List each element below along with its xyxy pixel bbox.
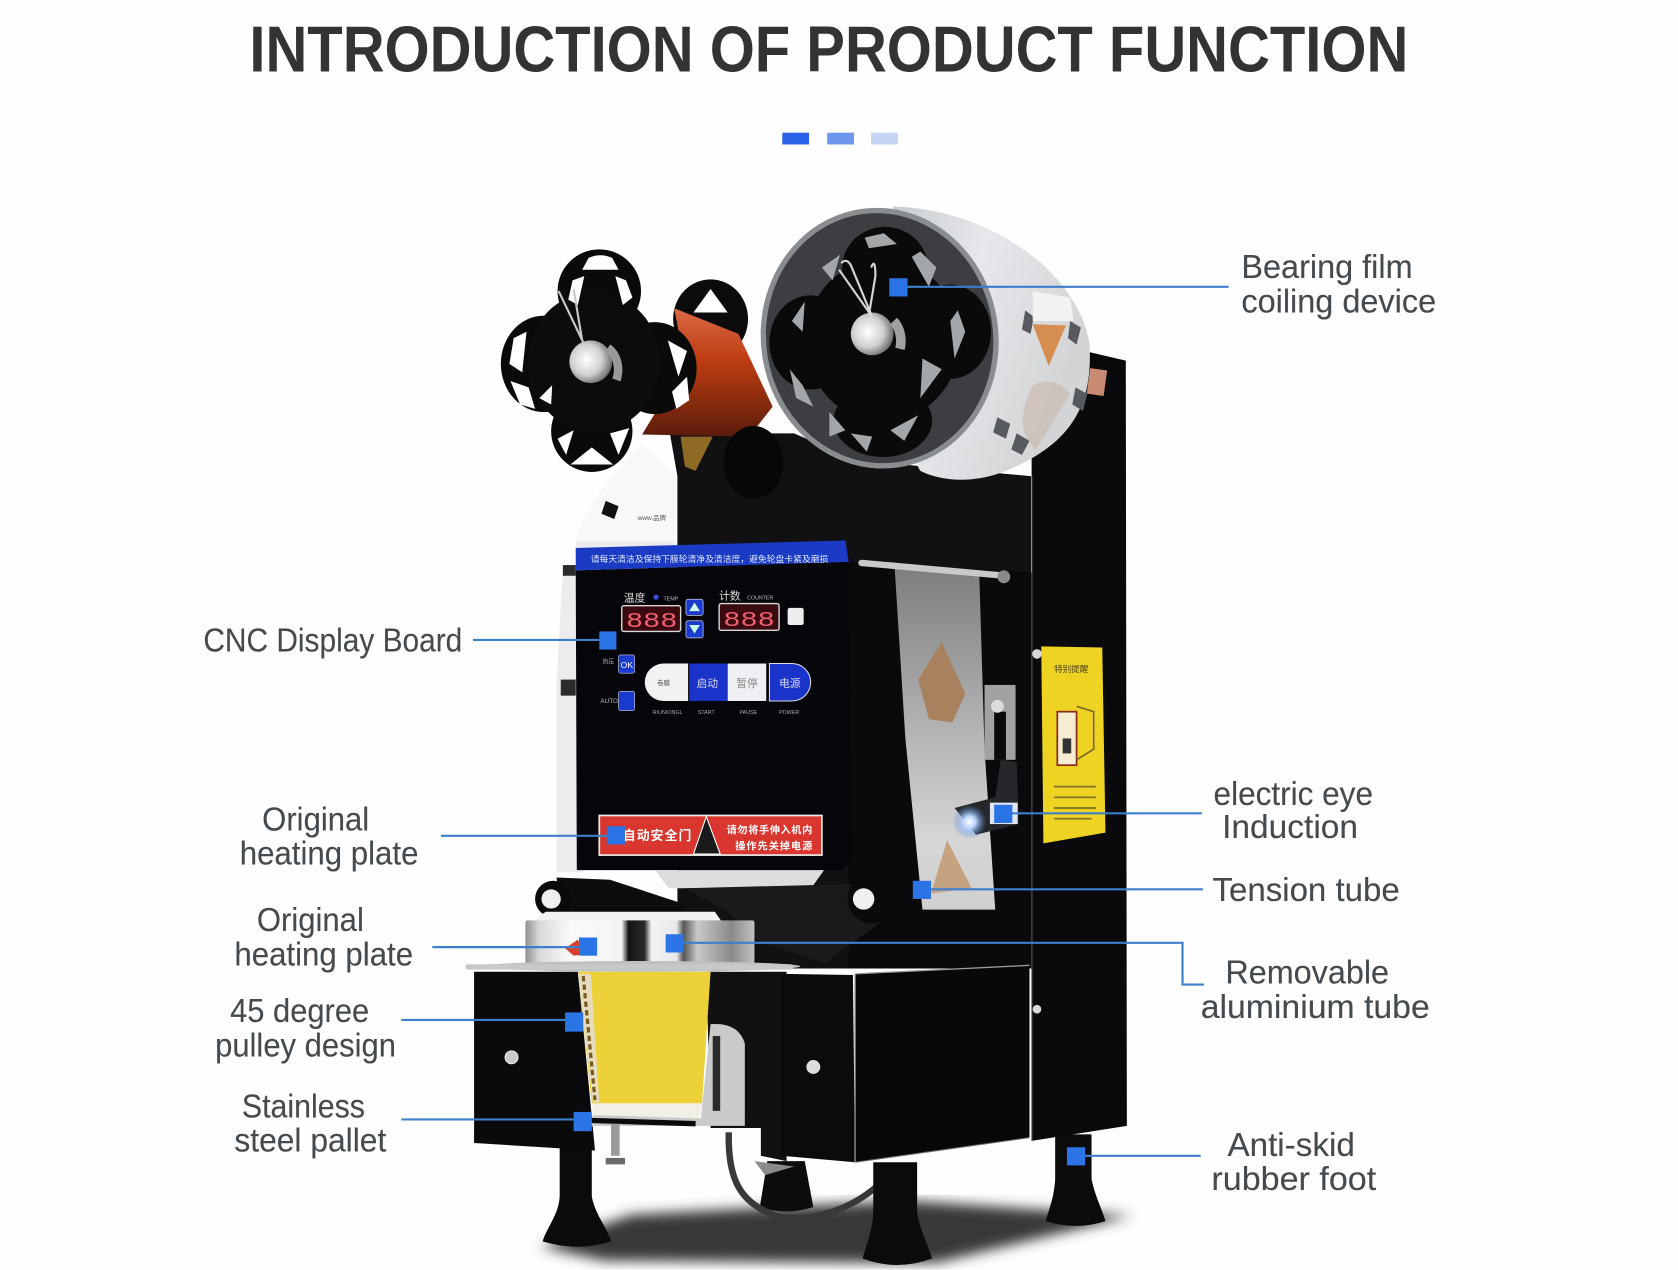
tower screws	[1032, 649, 1042, 1013]
product illustration: cup sealing machine: www.品牌	[637, 513, 667, 522]
film strip with tension rod	[861, 563, 1010, 910]
decorative title squares	[782, 133, 898, 144]
leader line: removable aluminium tube	[666, 934, 1204, 985]
function button strip: 电源	[779, 677, 801, 690]
rear foot	[760, 1161, 813, 1211]
label: original heating plate 1: Original	[262, 801, 369, 838]
marker	[666, 934, 684, 952]
sealing head and handles	[535, 870, 897, 963]
label: stainless steel pallet: Stainless	[242, 1088, 365, 1125]
function button strip: RIUNIONGL	[653, 710, 683, 716]
blue notice header	[576, 540, 849, 570]
marker	[1067, 1147, 1085, 1165]
label: electric eye induction	[1214, 776, 1373, 846]
counter readout	[719, 589, 804, 633]
counter readout: 计数	[719, 589, 741, 602]
marker	[913, 881, 931, 899]
lower cabinet	[754, 965, 1029, 1175]
inner dark column	[706, 972, 787, 1161]
leader line: 45 degree pulley design	[401, 1012, 583, 1032]
yellow warning sticker: 特别提醒	[1054, 663, 1089, 674]
label: 45 degree pulley design	[215, 993, 396, 1064]
front feet	[543, 1134, 1105, 1265]
removable aluminium tube	[466, 912, 800, 972]
function button strip: PAUSE	[739, 710, 758, 716]
left reel	[501, 249, 697, 472]
marker	[889, 278, 907, 296]
right side body panel	[849, 562, 1032, 969]
temperature readout: TEMP	[663, 596, 679, 602]
main film roll	[744, 192, 1090, 484]
label: original heating plate 1	[240, 801, 418, 873]
marker	[607, 826, 625, 844]
function button strip: POWER	[779, 710, 799, 716]
counter readout: 888	[723, 609, 775, 633]
red safety label	[599, 815, 822, 855]
control panel: 请每天清洁及保持下膜轮清净及清洁度，避免轮盘卡紧及磨损	[591, 553, 829, 564]
product illustration: cup sealing machine	[466, 192, 1132, 1265]
marker	[565, 1012, 583, 1032]
pallet plate	[505, 1024, 745, 1164]
function button strip: 卷膜	[657, 678, 670, 687]
label: anti-skid rubber foot: rubber foot	[1211, 1161, 1376, 1198]
label: bearing film coiling device	[1241, 249, 1436, 320]
temperature readout	[622, 591, 681, 634]
leader line: CNC display board	[473, 631, 616, 650]
counter readout: COUNTER	[747, 595, 774, 601]
label: original heating plate 2: Original	[257, 902, 364, 939]
label: bearing film coiling device: coiling device	[1241, 283, 1436, 320]
sensor bracket and electric eye	[952, 685, 1019, 839]
mode buttons: 热压	[602, 658, 614, 666]
leader line: original heating plate 1	[441, 826, 625, 844]
marker	[574, 1112, 592, 1131]
label: removable aluminium tube: aluminium tube	[1201, 989, 1430, 1026]
power cable	[729, 1132, 878, 1218]
label: original heating plate 2	[234, 902, 413, 973]
back panel	[670, 433, 1032, 969]
up and down buttons	[686, 599, 703, 638]
paper cup	[578, 972, 711, 1118]
label: stainless steel pallet: steel pallet	[234, 1123, 386, 1160]
label: original heating plate 1: heating plate	[240, 836, 418, 873]
panel body	[576, 562, 851, 870]
leader line: anti-skid rubber foot	[1067, 1147, 1201, 1165]
function button strip: START	[698, 710, 715, 716]
mode buttons	[600, 655, 635, 711]
temperature readout: 温度	[624, 591, 646, 604]
red safety label: 请勿将手伸入机内	[727, 824, 812, 837]
label: anti-skid rubber foot	[1211, 1127, 1376, 1198]
function button strip: 启动	[697, 677, 718, 690]
leader line: electric eye	[994, 805, 1202, 823]
label: stainless steel pallet	[234, 1088, 386, 1160]
marker	[994, 805, 1012, 823]
label: anti-skid rubber foot: Anti-skid	[1227, 1127, 1355, 1164]
temperature readout: 888	[626, 610, 677, 634]
function button strip	[645, 664, 811, 716]
yellow warning sticker	[1041, 646, 1105, 843]
leader line: stainless steel pallet	[401, 1112, 592, 1131]
marker	[579, 937, 597, 956]
marker	[599, 631, 616, 650]
label: bearing film coiling device: Bearing film	[1241, 249, 1413, 286]
label: removable aluminium tube: Removable	[1225, 955, 1389, 992]
label: tension tube: Tension tube	[1212, 872, 1400, 909]
left lower block	[474, 972, 595, 1150]
red safety label: 自动安全门	[623, 828, 691, 843]
leader line: bearing film coiling device	[889, 278, 1229, 296]
label: removable aluminium tube	[1201, 955, 1430, 1026]
rear orange film reel	[642, 279, 783, 499]
label: CNC display board: CNC Display Board	[203, 623, 462, 660]
leader line: tension tube	[913, 881, 1203, 899]
left white fan	[556, 444, 676, 872]
control panel	[576, 540, 851, 870]
mode buttons: OK	[621, 660, 633, 670]
title: INTRODUCTION OF PRODUCT FUNCTION	[249, 13, 1408, 86]
mode buttons: AUTO	[600, 698, 618, 705]
red safety label: 操作先关掉电源	[735, 840, 812, 853]
tower column	[1032, 352, 1127, 1141]
function button strip: 暂停	[736, 677, 758, 690]
ground shadow	[540, 1201, 1132, 1263]
label: electric eye induction: electric eye	[1214, 776, 1373, 813]
label: electric eye induction: Induction	[1222, 809, 1358, 846]
leader line: original heating plate 2	[432, 937, 597, 956]
label: original heating plate 2: heating plate	[234, 936, 413, 973]
label: 45 degree pulley design: pulley design	[215, 1027, 396, 1064]
red release knob	[565, 940, 584, 956]
label: 45 degree pulley design: 45 degree	[230, 993, 369, 1030]
